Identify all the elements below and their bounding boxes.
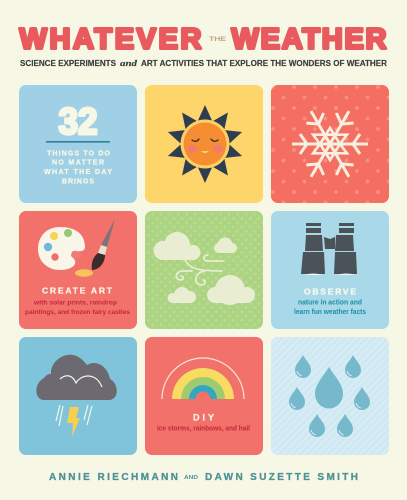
panel text: OBSERVE [304, 286, 356, 296]
icon: storm cloud [36, 355, 117, 400]
subtitle: and [120, 58, 138, 68]
icon: snowflake [292, 106, 368, 182]
icon: rainbow [162, 358, 244, 399]
authors: ANNIE RIECHMANN [49, 472, 178, 483]
authors: DAWN SUZETTE SMITH [205, 472, 358, 483]
icon: binoculars [301, 223, 357, 275]
panel: diy [145, 337, 263, 455]
number 32: 32 [58, 101, 98, 142]
icon: palette [38, 227, 85, 270]
panel text: WHAT THE DAY [44, 169, 112, 176]
title: WEATHER [232, 24, 387, 56]
panel text: with solar prints, raindrop [33, 300, 117, 306]
panel: sun [145, 85, 263, 203]
panel text: ice storms, rainbows, and hail [157, 426, 250, 432]
icon: cloud highlight [60, 376, 102, 387]
panel text: learn fun weather facts [294, 309, 366, 316]
panel text: BRINGS [62, 178, 94, 186]
panel text: NO MATTER [52, 160, 104, 166]
panel text [157, 412, 250, 432]
panel: snowflake [271, 85, 389, 203]
subtitle: SCIENCE EXPERIMENTS [20, 59, 117, 68]
icon: paintbrush [75, 219, 115, 277]
panel: 32 things [19, 85, 137, 203]
icon: sun [165, 105, 245, 183]
authors: AND [184, 475, 198, 481]
subtitle: ART ACTIVITIES THAT EXPLORE THE WONDERS OF WEATHER [141, 59, 387, 68]
title: WHATEVER [20, 24, 202, 56]
subtitle [20, 58, 387, 68]
panel text: paintings, and frozen fairy castles [25, 309, 130, 316]
icon: lightning bolt [67, 407, 80, 437]
title [20, 24, 387, 56]
panel text: DIY [193, 412, 214, 422]
panel text: CREATE ART [42, 286, 113, 296]
authors [49, 472, 358, 483]
panel text: nature in action and [298, 300, 362, 306]
panel: create art [19, 211, 137, 329]
icon: raindrops [289, 355, 370, 437]
icon: wind [176, 255, 223, 285]
panel text [294, 286, 366, 316]
panel: observe [271, 211, 389, 329]
panel text [25, 286, 130, 316]
panel text: THINGS TO DO [47, 150, 111, 158]
title: THE [209, 37, 226, 43]
icon: rain [56, 405, 92, 426]
icon: clouds [154, 232, 255, 305]
panel: clouds and wind [145, 211, 263, 329]
panel: storm [19, 337, 137, 455]
panel: raindrops [271, 337, 389, 455]
panel text [44, 150, 112, 186]
